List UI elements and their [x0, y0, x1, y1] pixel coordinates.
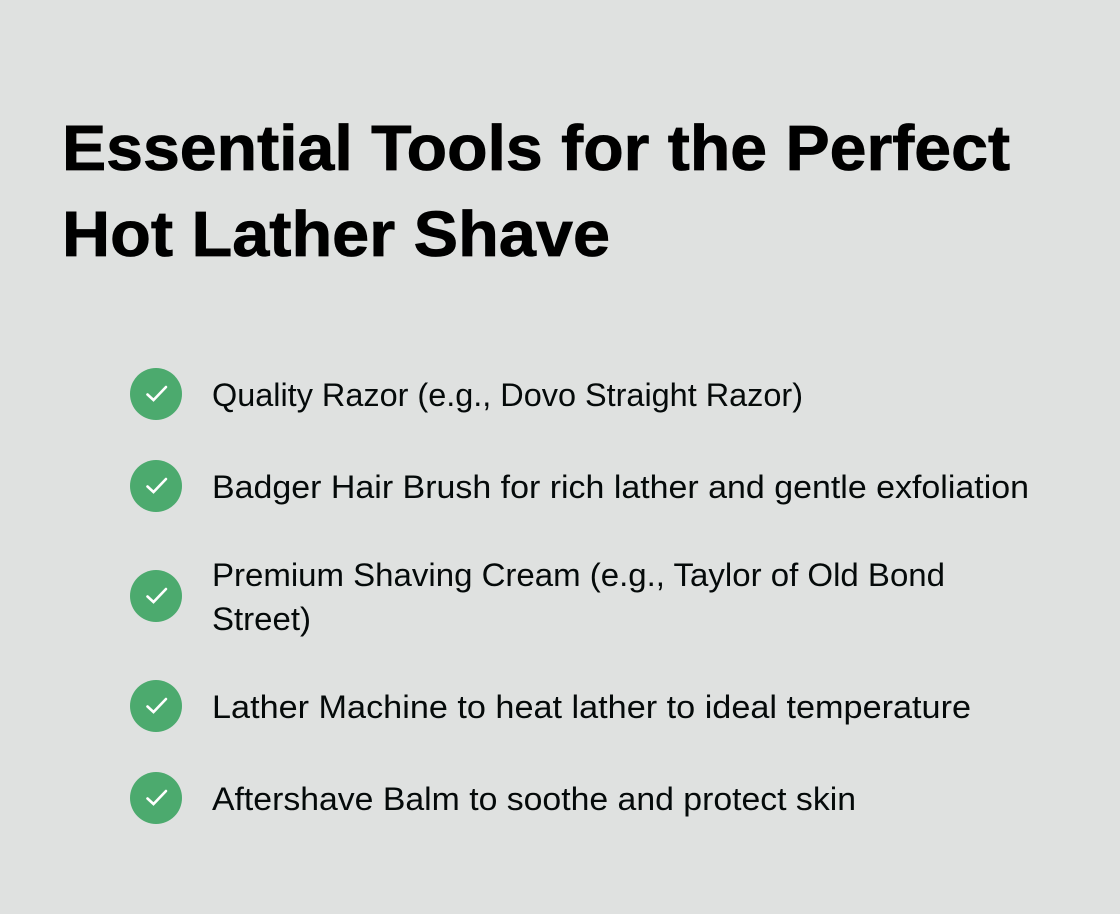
item: quality razor: Quality Razor (e.g., Dovo Straight Razor)	[212, 377, 803, 413]
title: Essential Tools for the Perfect	[62, 112, 1010, 184]
item: premium shaving cream	[130, 557, 945, 637]
item: badger hair brush: Badger Hair Brush for rich lather and gentle exfoliation	[212, 469, 1029, 505]
item: badger hair brush	[130, 460, 1029, 512]
title: Hot Lather Shave	[62, 198, 610, 270]
checklist	[130, 368, 1029, 824]
item: lather machine	[130, 680, 971, 732]
item: lather machine: Lather Machine to heat lather to ideal temperature	[212, 689, 971, 725]
item: premium shaving cream: Premium Shaving Cream (e.g., Taylor of Old Bond	[212, 557, 945, 593]
title	[62, 112, 1010, 270]
item: aftershave balm	[130, 772, 856, 824]
item: aftershave balm: Aftershave Balm to soothe and protect skin	[212, 781, 856, 817]
item: quality razor	[130, 368, 803, 420]
item: premium shaving cream: Street)	[212, 601, 311, 637]
